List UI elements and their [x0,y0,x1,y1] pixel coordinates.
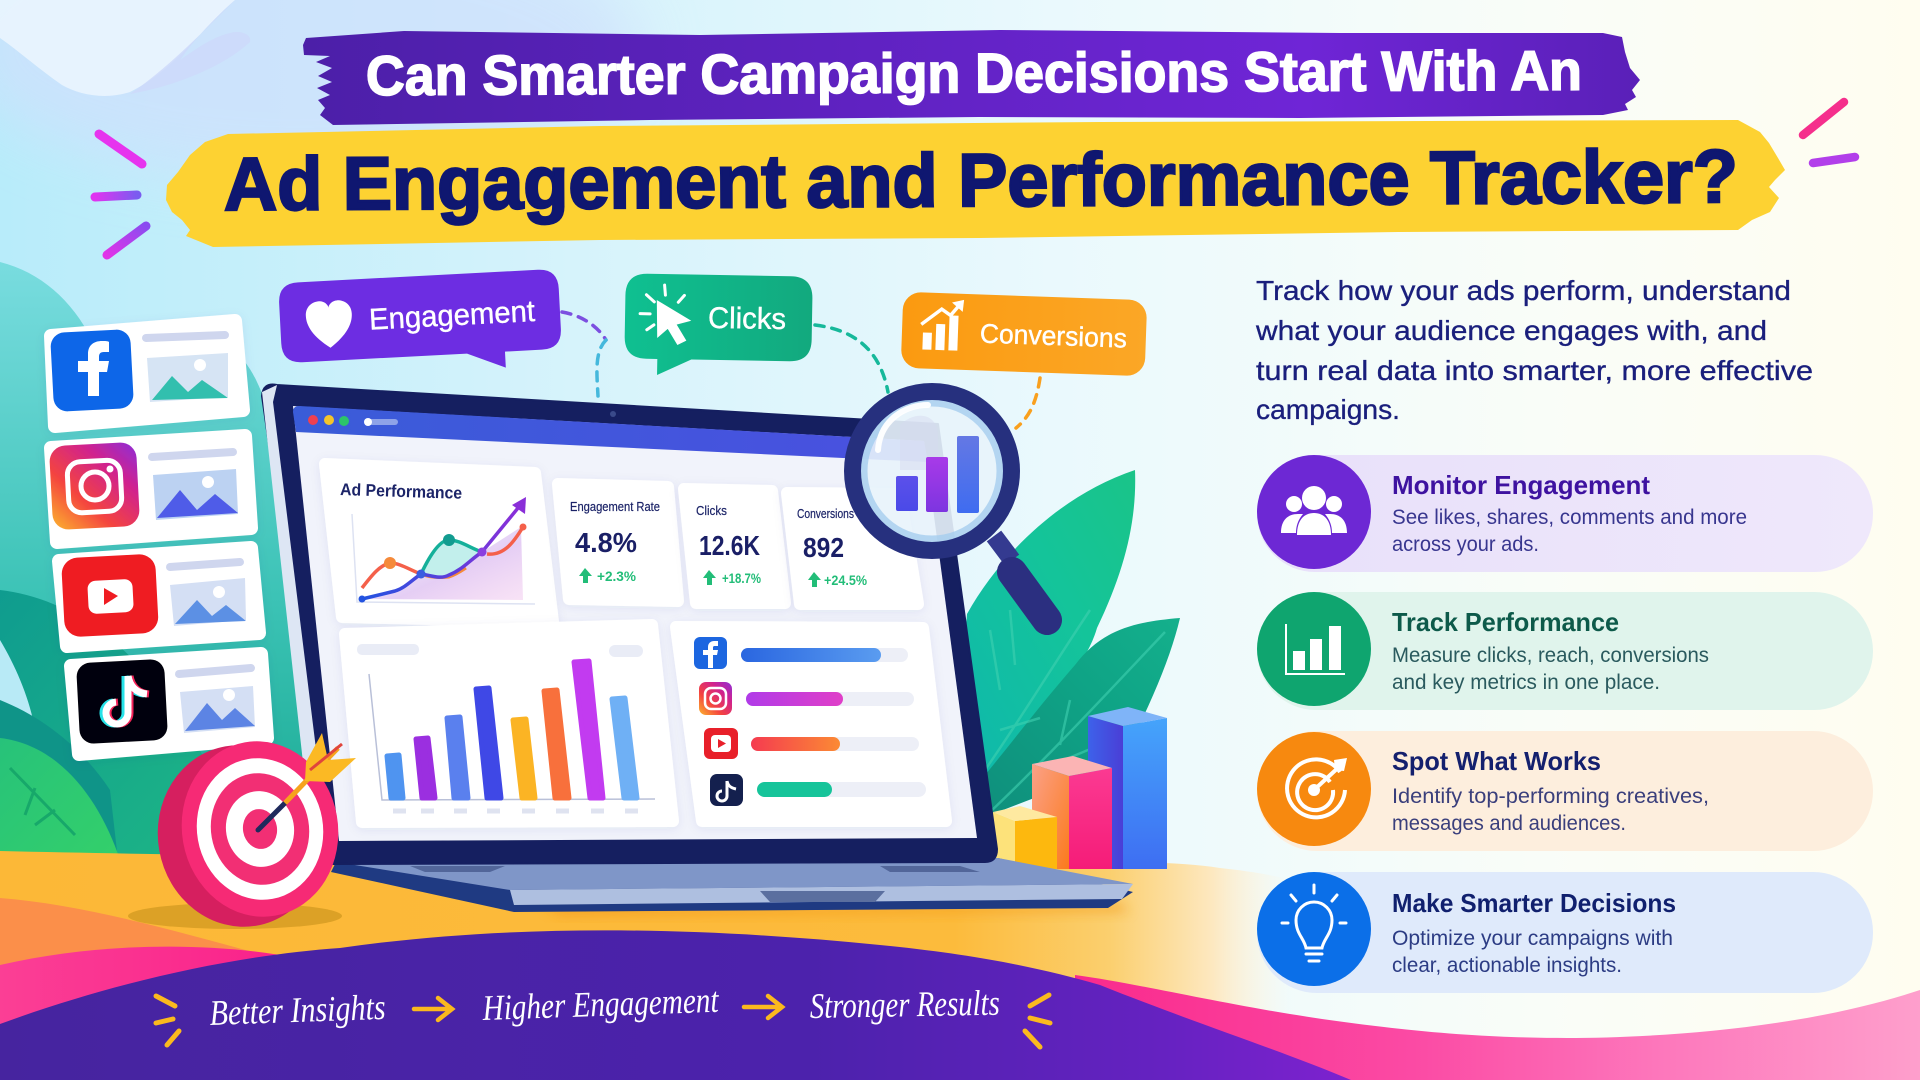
title: first line: Can Smarter Campaign Decisions Start With An [366,39,1582,107]
icon: up arrow [703,570,716,585]
metric change: +2.3% [597,568,637,584]
blue bar [1088,707,1167,869]
panel: Conversions [787,493,918,604]
icon: target [1287,758,1347,817]
card: Facebook [50,321,243,426]
metric value: 892 [803,532,844,563]
card body: messages and audiences. [1392,811,1626,835]
browser header [293,406,928,462]
row: Instagram [699,682,914,715]
tagline: Higher Engagement: Higher Engagement [481,980,720,1028]
panel: bar chart [345,625,673,822]
browser dots [308,415,398,426]
icon: up arrow [579,568,592,583]
bottom purple wave band [0,930,1351,1080]
webcam [610,411,616,417]
card: Instagram [49,436,251,542]
handle [994,536,1012,560]
sparks: left [156,996,179,1045]
lens [859,398,1005,544]
tagline [156,980,1050,1047]
card title: Track Performance [1392,607,1619,637]
tagline: Better Insights: Better Insights [209,987,386,1033]
target with arrow [128,729,356,940]
screen [293,406,977,841]
3D stacked bars [993,707,1167,869]
heading: Ad Performance: Ad Performance [340,480,462,503]
burst marks left of title [95,134,146,255]
bottom wave: pink [0,947,292,1050]
label: Engagement: Engagement [368,295,536,337]
decorative top-left swoosh [0,0,640,180]
laptop lid [262,384,997,864]
card title: Monitor Engagement [1392,470,1650,500]
card: Monitor Engagement [1257,455,1873,572]
ring [852,392,1012,550]
card title: Make Smarter Decisions [1392,888,1676,918]
intro paragraph [1255,275,1813,425]
bubble: Conversions [901,292,1147,376]
icon: people [1281,486,1347,535]
card body [1392,505,1747,556]
right foliage [960,470,1180,815]
connector dashes [562,312,1040,428]
laptop [262,384,1133,916]
intro paragraph: turn real data into smarter, more effective [1256,355,1813,386]
card body: clear, actionable insights. [1392,953,1622,977]
row: TikTok [710,774,926,806]
icon: light bulb [1282,885,1346,961]
bubble: Clicks [624,273,813,378]
bars [387,661,637,798]
card: TikTok [71,654,267,754]
icon: heart [305,300,354,349]
metric value: 4.8% [575,527,637,558]
row: Facebook [694,637,908,669]
card body [1392,643,1709,694]
metric label: Clicks [696,503,727,518]
label: Clicks: Clicks [708,302,786,336]
panel: Clicks [684,489,785,603]
intro paragraph: what your audience engages with, and [1255,315,1767,346]
ground [0,851,1320,1010]
bottom wave: orange [0,898,300,1010]
burst marks right of title [1803,102,1855,163]
arrow [744,996,782,1018]
card: Track Performance [1257,592,1873,710]
card body: See likes, shares, comments and more [1392,505,1747,529]
intro paragraph: campaigns. [1256,394,1400,425]
left foliage [0,262,330,870]
card body [1392,926,1673,977]
bottom wave: right pink band [1075,975,1920,1080]
title: yellow brush banner [166,120,1785,247]
icon: bar chart [1286,624,1345,674]
card body: across your ads. [1392,532,1539,556]
card body: and key metrics in one place. [1392,670,1660,694]
lens bars [896,436,979,513]
line chart [352,497,535,604]
panel: Ad Performance chart [325,464,553,622]
card body: Measure clicks, reach, conversions [1392,643,1709,667]
icon: cursor [640,285,691,345]
metric change: +24.5% [824,572,867,588]
metric label: Conversions [797,506,854,521]
target rings [168,729,352,929]
tagline: Stronger Results: Stronger Results [809,983,1000,1026]
pink bar [1032,756,1112,869]
arrow [258,733,356,830]
label: Conversions: Conversions [979,318,1127,354]
panel: platform comparison [676,627,946,821]
metric value: 12.6K [699,530,760,561]
social ad cards [49,321,267,754]
card: YouTube [59,548,259,646]
panel: Engagement Rate [558,484,678,601]
arrow [414,998,452,1020]
yellow bar [993,806,1057,869]
sparks: right [1025,995,1050,1047]
icon: chart with arrow [920,298,964,351]
magnifying glass [852,392,1047,620]
intro paragraph: Track how your ads perform, understand [1256,275,1791,306]
metric change: +18.7% [722,570,761,586]
title: second line: Ad Engagement and Performance Tracker? [224,134,1738,226]
card body: Identify top-performing creatives, [1392,784,1709,808]
card body: Optimize your campaigns with [1392,926,1673,950]
bubble: Engagement [278,269,563,379]
title: purple brush banner [303,30,1640,125]
card body [1392,784,1709,835]
card: Spot What Works [1257,731,1873,851]
card: Make Smarter Decisions [1257,872,1873,993]
metric label: Engagement Rate [570,499,660,514]
card title: Spot What Works [1392,746,1601,776]
target shadow [128,903,342,929]
row: YouTube [704,728,919,759]
laptop base [331,858,1133,916]
icon: up arrow [808,572,821,587]
